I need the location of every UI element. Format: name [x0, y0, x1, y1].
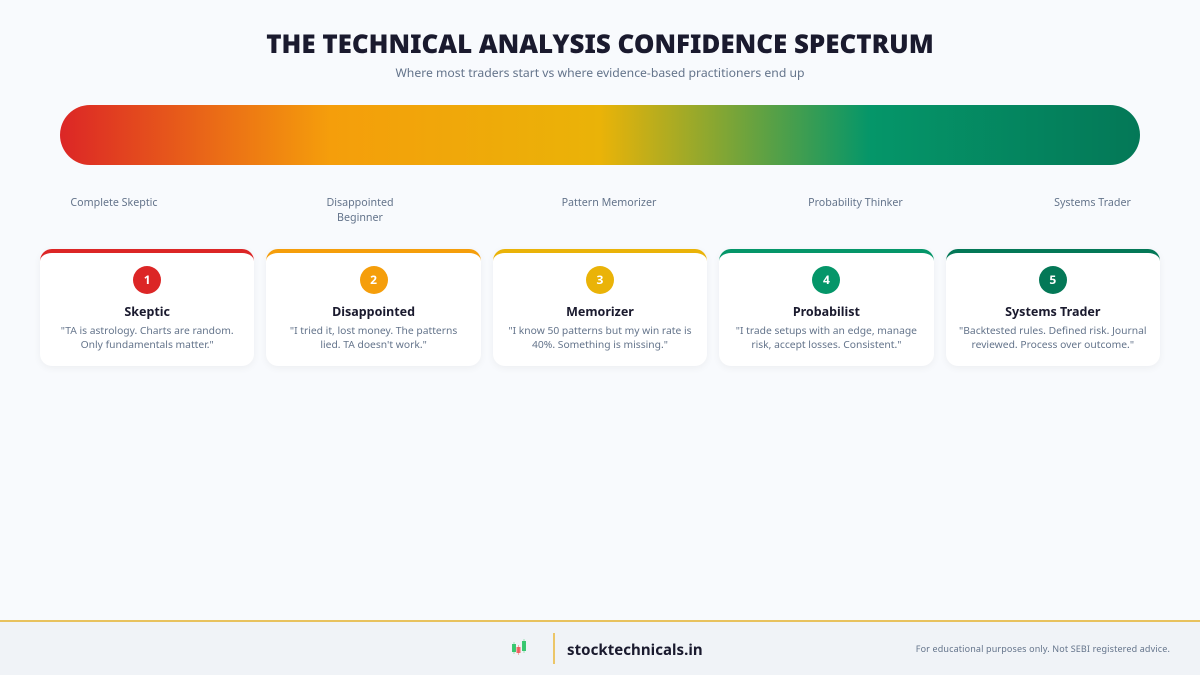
quote: Probabilist [736, 324, 917, 352]
title: THE TECHNICAL ANALYSIS CONFIDENCE SPECTRUM [266, 25, 934, 61]
quote: Memorizer: 40%. Something is missing." [532, 338, 668, 352]
spectrum label: Complete Skeptic: Complete Skeptic [70, 196, 158, 210]
footer separator [553, 633, 555, 664]
heading: Probabilist: Probabilist [793, 303, 860, 320]
badge 4 [812, 266, 840, 294]
quote: Memorizer: "I know 50 patterns but my win rate is [508, 324, 692, 338]
quote: Skeptic: "TA is astrology. Charts are random. [61, 324, 234, 338]
badge 2 [360, 266, 388, 294]
quote: Systems Trader [959, 324, 1147, 352]
quote: Disappointed: lied. TA doesn't work." [320, 338, 427, 352]
spectrum label: Probability Thinker: Probability Thinker [808, 196, 903, 210]
spectrum label: Systems Trader: Systems Trader [1054, 196, 1131, 210]
heading: Systems Trader: Systems Trader [1005, 303, 1100, 320]
badge 5: 5 [1049, 271, 1056, 288]
quote: Skeptic [61, 324, 234, 352]
heading: Memorizer: Memorizer [566, 303, 634, 320]
spectrum label: Pattern Memorizer: Pattern Memorizer [562, 196, 656, 210]
panel: Skeptic [40, 249, 254, 366]
spectrum label: Disappointed Beginner: Beginner [337, 211, 383, 225]
spectrum label: Disappointed Beginner [326, 196, 394, 225]
badge 5 [1039, 266, 1067, 294]
quote: Disappointed: "I tried it, lost money. The patterns [290, 324, 457, 338]
panel: Probabilist [719, 249, 934, 366]
quote: Probabilist: "I trade setups with an edge, manage [736, 324, 917, 338]
quote: Skeptic: Only fundamentals matter." [81, 338, 214, 352]
panel: Disappointed [266, 249, 481, 366]
badge 1: 1 [144, 271, 151, 288]
disclaimer: For educational purposes only. Not SEBI registered advice. [916, 642, 1170, 655]
icon: candlesticks [512, 639, 526, 655]
brand name: stocktechnicals.in [567, 640, 703, 660]
badge 2: 2 [370, 271, 377, 288]
quote: Memorizer [508, 324, 692, 352]
heading: Disappointed: Disappointed [332, 303, 415, 320]
quote: Systems Trader: "Backtested rules. Defined risk. Journal [959, 324, 1147, 338]
badge 3 [586, 266, 614, 294]
heading: Skeptic: Skeptic [124, 303, 170, 320]
panel: Systems Trader [946, 249, 1160, 366]
footer bar [0, 620, 1200, 675]
quote: Systems Trader: reviewed. Process over outcome." [972, 338, 1134, 352]
spectrum gradient bar [60, 105, 1140, 165]
badge 4: 4 [823, 271, 830, 288]
quote: Disappointed [290, 324, 457, 352]
badge 1 [133, 266, 161, 294]
panel: Memorizer [493, 249, 707, 366]
subtitle: Where most traders start vs where evidence-based practitioners end up [395, 64, 805, 81]
badge 3: 3 [597, 271, 603, 288]
spectrum label: Disappointed Beginner: Disappointed [326, 196, 394, 210]
quote: Probabilist: risk, accept losses. Consistent." [751, 338, 901, 352]
